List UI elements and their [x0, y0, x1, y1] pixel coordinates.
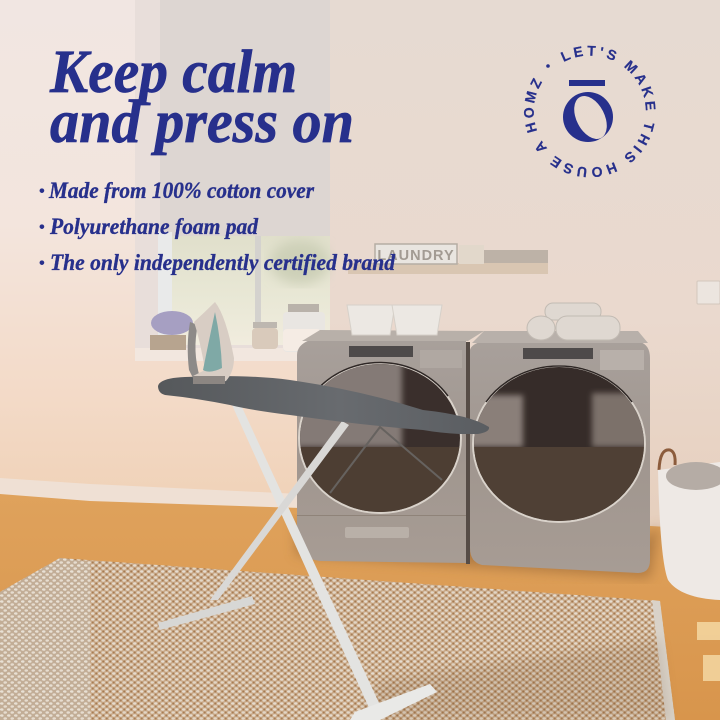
left wall background — [0, 0, 335, 500]
left towel — [527, 316, 555, 340]
dial display — [600, 350, 644, 370]
door ring dark rim — [312, 362, 448, 396]
glass jar with pegs — [252, 322, 278, 349]
shadow across rug — [360, 640, 670, 720]
left reflection — [465, 395, 523, 447]
baseboard — [0, 478, 300, 508]
light switch — [697, 281, 720, 304]
bullet dots: • — [39, 183, 45, 200]
dryer glass — [474, 367, 644, 521]
title — [49, 39, 354, 156]
rug main — [0, 558, 675, 720]
feature 3: The only independently certified brand — [50, 250, 395, 275]
feature 2: Polyurethane foam pad — [49, 214, 258, 239]
carpet reflection — [298, 447, 462, 517]
basket left — [347, 305, 395, 335]
front foot — [350, 684, 437, 720]
hamper handle — [659, 450, 675, 470]
washer glass — [300, 364, 460, 512]
logo macron bar — [569, 80, 605, 86]
dark glass — [298, 362, 462, 516]
top towel — [545, 303, 601, 320]
washer door ring — [298, 362, 462, 514]
wall reflection — [300, 364, 406, 447]
ironing board legs — [158, 403, 437, 720]
right reflection — [592, 393, 652, 447]
window sill — [135, 348, 298, 361]
lavender pot — [150, 335, 186, 350]
right towel — [556, 316, 620, 340]
logo badge — [524, 46, 656, 178]
circular slogan: LET'S MAKE THIS HOUSE A HOMZ — [524, 46, 656, 178]
bullet dots: • — [39, 219, 45, 236]
hamper body — [658, 462, 720, 600]
washer shadow — [296, 520, 660, 578]
shelf plants — [484, 250, 548, 263]
carpet reflection — [472, 447, 646, 523]
dial display — [420, 350, 462, 368]
feature 1: Made from 100% cotton cover — [48, 178, 315, 203]
iron — [188, 302, 234, 384]
lower panel line — [297, 515, 466, 516]
hamper contents — [666, 462, 720, 490]
outdoor view — [172, 235, 330, 345]
rear foot — [158, 596, 255, 630]
mullion — [255, 235, 261, 345]
storage baskets — [347, 305, 442, 335]
wall shelf — [348, 244, 548, 274]
left window column — [158, 232, 172, 347]
dark gap — [466, 342, 470, 564]
shelf plank — [348, 263, 548, 274]
rug edge — [652, 600, 675, 720]
reflected rods — [330, 427, 442, 493]
title line 2: and press on — [50, 89, 354, 156]
slogan dot — [546, 64, 550, 68]
basket right — [392, 305, 442, 335]
dryer body — [470, 342, 650, 573]
logo o mark — [563, 92, 613, 142]
distant trees — [270, 240, 330, 284]
dryer door ring — [472, 365, 646, 523]
iron sole — [193, 376, 225, 384]
washer top — [302, 330, 484, 341]
dryer top — [472, 331, 648, 343]
window frame — [135, 0, 330, 352]
drawer handle — [345, 527, 409, 538]
large glass jar — [283, 304, 325, 352]
control panel — [349, 346, 413, 357]
iron handle — [188, 322, 200, 380]
window — [135, 0, 330, 361]
short leg — [210, 421, 349, 600]
laundry sign: LAUNDRY — [377, 248, 455, 264]
rug left band — [0, 558, 90, 720]
long leg — [232, 403, 380, 710]
title line 1: Keep calm — [49, 39, 297, 106]
wood floor — [0, 492, 720, 720]
sill decor — [150, 304, 325, 352]
rolled towels — [527, 303, 620, 340]
sunlight on floor — [697, 622, 720, 681]
bullet dots: • — [39, 255, 45, 272]
washer — [290, 330, 484, 563]
dryer — [465, 331, 652, 573]
control panel — [523, 348, 593, 359]
washer body — [297, 340, 466, 563]
roller shade — [160, 0, 330, 236]
iron tank — [203, 312, 222, 372]
woven rug — [0, 558, 675, 720]
light patch — [697, 622, 720, 640]
door ring dark rim — [486, 366, 632, 402]
feature list — [39, 178, 395, 275]
light patch — [703, 655, 720, 681]
lavender — [151, 311, 193, 335]
right wall background — [330, 0, 720, 530]
laundry hamper — [658, 450, 720, 600]
basket on shelf — [459, 245, 484, 264]
dark glass — [472, 365, 646, 523]
ironing board — [158, 376, 489, 434]
iron body — [193, 302, 234, 383]
